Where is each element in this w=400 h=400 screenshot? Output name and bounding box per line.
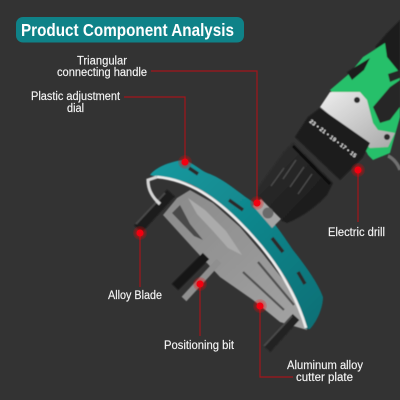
callout: positioning bit — [164, 277, 235, 352]
callout: electric drill: Electric drill — [328, 227, 385, 239]
positioning bit — [184, 261, 219, 299]
callout: plastic adjustment dial — [31, 91, 192, 169]
electric drill — [257, 20, 400, 223]
teal dial ring — [150, 160, 323, 329]
callout: aluminum alloy cutter plate: cutter plate — [296, 372, 353, 384]
callout: triangular connecting handle — [57, 56, 264, 210]
callout: positioning bit: Positioning bit — [164, 340, 235, 352]
callout: aluminum alloy cutter plate — [253, 299, 363, 384]
callout: triangular connecting handle: connecting handle — [57, 67, 147, 79]
callout: electric drill — [328, 163, 385, 239]
alloy blade lower — [267, 317, 296, 349]
electric drill: 23 • 21 • 19 • 17 • 15 — [308, 119, 357, 159]
callout: triangular connecting handle: Triangular — [77, 56, 127, 68]
callout: aluminum alloy cutter plate: Aluminum alloy — [287, 360, 363, 372]
callout: alloy blade: Alloy Blade — [108, 290, 162, 302]
silver rim — [157, 177, 306, 328]
cutter plate — [163, 190, 307, 330]
callout: plastic adjustment dial: Plastic adjustment — [31, 91, 121, 103]
callout: plastic adjustment dial: dial — [67, 103, 84, 115]
title banner: Product Component Analysis — [21, 20, 234, 40]
alloy blade left — [138, 193, 171, 229]
hole cutter — [136, 160, 323, 349]
connecting hub — [253, 199, 281, 228]
callout: alloy blade — [108, 226, 162, 302]
alloy blade middle — [175, 256, 206, 287]
